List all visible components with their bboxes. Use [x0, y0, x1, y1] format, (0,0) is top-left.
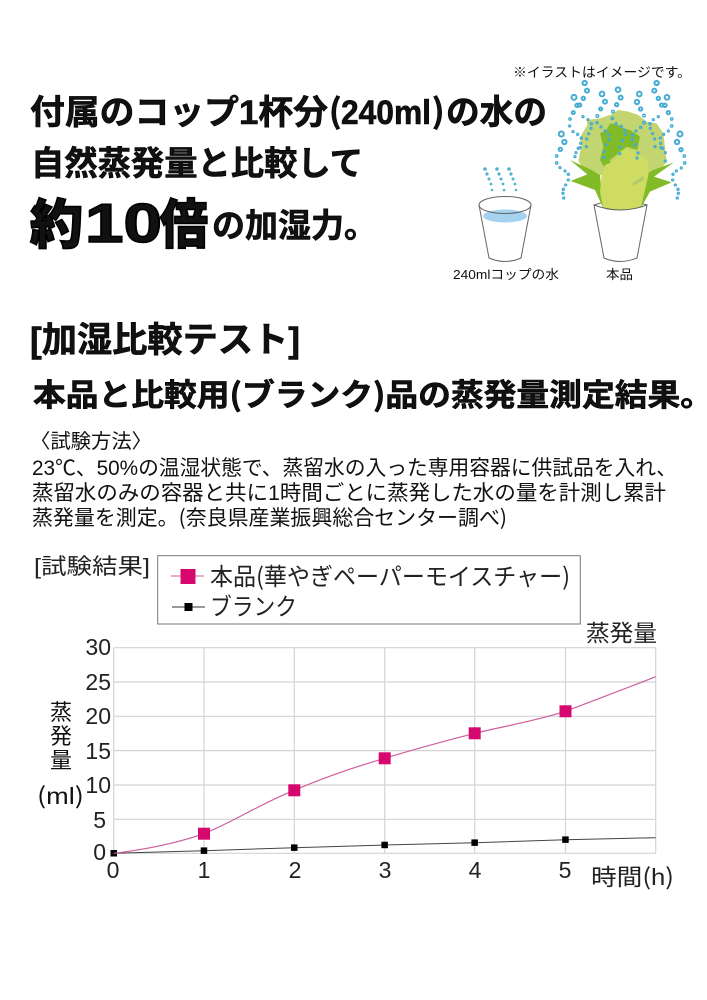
icon: cup of water	[479, 167, 531, 262]
icon: paper cup back	[594, 200, 647, 205]
label: cup of water: 240mlコップの水	[453, 267, 559, 282]
y axis tick labels: 20	[85, 703, 111, 729]
x axis tick labels: 2	[289, 857, 301, 883]
label: product: 本品	[606, 267, 633, 282]
icon: paper plant	[555, 81, 686, 211]
text block: test method: 23℃、50%の温湿状態で、蒸留水の入った専用容器に供試品を入れ、	[32, 457, 677, 480]
title: の加湿力。	[212, 207, 377, 244]
icon: paper cup	[594, 205, 647, 262]
y axis tick labels: 30	[85, 634, 111, 660]
legend item: product: 本品(華やぎペーパーモイスチャー)	[210, 557, 570, 592]
y axis title: (ml)	[37, 777, 84, 811]
title: 付属のコップ1杯分	[30, 94, 328, 132]
title	[30, 85, 547, 255]
y axis tick labels: 10	[85, 772, 111, 798]
x axis tick labels: 5	[559, 857, 571, 883]
text block: test method	[30, 430, 677, 532]
title: 10	[85, 192, 162, 254]
text block: test method: 蒸留水のみの容器と共に1時間ごとに蒸発した水の量を計測し累計	[32, 482, 666, 505]
x axis tick labels: 0	[107, 857, 119, 883]
vapour bubbles, large	[559, 81, 683, 151]
x axis tick labels	[107, 857, 571, 883]
title: 自然蒸発量と比較して	[31, 146, 363, 183]
note: illustration disclaimer: ※イラストはイメージです。	[513, 65, 691, 80]
chart grid	[114, 648, 656, 853]
title: 240ml	[341, 94, 431, 132]
text block: test method: 〈試験方法〉	[30, 430, 152, 453]
line chart: evaporation over time	[37, 620, 674, 892]
legend item: blank: ブランク	[210, 594, 297, 621]
y axis title: 発	[50, 724, 72, 749]
legend	[158, 556, 580, 624]
x axis tick labels: 4	[469, 857, 482, 883]
title: の水の	[446, 94, 547, 132]
series label: evaporation: 蒸発量	[586, 620, 657, 646]
y axis title: 蒸	[50, 700, 72, 725]
heading: humidification test: [加湿比較テスト]	[30, 321, 300, 360]
title: (	[329, 85, 341, 133]
y axis tick labels: 25	[85, 669, 111, 695]
heading: test results: [試験結果]	[34, 554, 150, 579]
icon: product with vapour	[555, 81, 686, 262]
y axis title	[37, 700, 84, 811]
text block: test method: 蒸発量を測定。(奈良県産業振興総合センター調べ)	[32, 502, 507, 532]
title: 約	[30, 196, 83, 255]
y axis tick labels: 0	[93, 839, 106, 865]
vapour bubbles, small	[555, 110, 686, 199]
y axis tick labels: 15	[85, 738, 111, 764]
legend item: blank	[172, 594, 297, 621]
y axis tick labels: 5	[93, 807, 106, 833]
y axis title: 量	[50, 748, 72, 773]
x axis tick labels: 1	[198, 857, 210, 883]
title: 倍	[160, 196, 208, 255]
x axis tick labels: 3	[379, 857, 391, 883]
title: )	[432, 85, 444, 133]
series: product	[114, 677, 656, 853]
series: blank	[110, 836, 656, 856]
x axis title: 時間(h)	[591, 858, 674, 892]
y axis tick labels	[85, 634, 111, 865]
subheading: result summary: 本品と比較用 (ブランク)品の蒸発量測定結果。	[33, 370, 707, 415]
